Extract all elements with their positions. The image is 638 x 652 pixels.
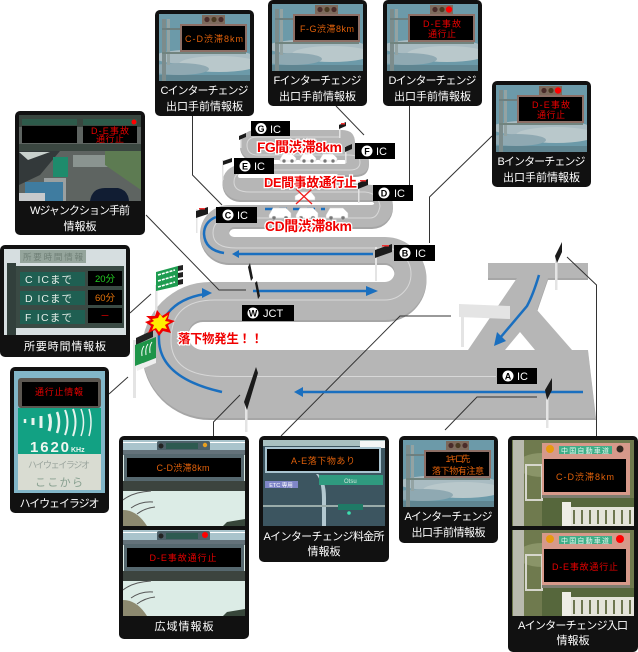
panel: W junction: 通行止	[96, 133, 124, 144]
panel: W junction	[15, 111, 145, 235]
panel: A toll gate board: 情報板	[308, 544, 340, 558]
panel: F interchange	[262, 0, 372, 106]
IC label F	[355, 143, 395, 159]
IC label B: B	[402, 248, 409, 258]
panel: W junction: D-E事故	[91, 125, 129, 136]
panel: F interchange: Fインターチェンジ	[274, 74, 362, 87]
panel: A exit board: Aインターチェンジ	[404, 510, 492, 523]
panel: B interchange: D-E事故	[532, 99, 570, 110]
panel: A toll gate board: Otsu	[344, 479, 357, 485]
panel: D interchange: 出口手前情報板	[394, 89, 471, 103]
panel: D interchange: Dインターチェンジ	[388, 74, 476, 87]
panel: wide area board: D-E事故通行止	[150, 552, 216, 563]
panel: A entrance board: D-E事故通行止	[552, 561, 618, 572]
IC label E: IC	[254, 161, 265, 173]
panel: highway radio: 1620	[30, 439, 69, 456]
JCT label W	[242, 305, 294, 321]
panel: B interchange: 通行止	[537, 109, 565, 120]
IC label B	[394, 245, 435, 261]
panel: travel time board	[0, 245, 130, 357]
IC label G	[251, 121, 290, 136]
IC label B: IC	[415, 248, 426, 260]
panel: A toll gate board: Aインターチェンジ料金所	[264, 529, 384, 543]
sign: green guide board	[156, 265, 183, 291]
roadside signs	[133, 122, 562, 432]
IC label G: IC	[270, 124, 281, 136]
IC label A: IC	[517, 371, 528, 383]
IC label D: D	[381, 188, 388, 198]
panel: A exit board	[393, 436, 503, 543]
IC label A	[497, 368, 537, 384]
panel: D interchange: D-E事故	[423, 18, 461, 29]
panel: A entrance board: 中国自動車道	[561, 536, 609, 545]
panel: A exit board: 1キロ先	[446, 453, 470, 464]
sign: highway radio	[135, 330, 156, 371]
traffic flow arrows	[159, 209, 583, 397]
panel: travel time board: F ICまで	[25, 312, 72, 324]
panel: A entrance board: C-D渋滞8km	[556, 471, 614, 482]
JCT label W: W	[249, 308, 258, 318]
panel: highway radio	[10, 367, 109, 513]
panel: D interchange: 通行止	[428, 28, 456, 39]
panel: F interchange: F-G渋滞8km	[300, 23, 354, 34]
panel: W junction: Wジャンクション手前	[30, 203, 130, 217]
panel: A toll gate board: A-E落下物あり	[291, 455, 355, 466]
panel: highway radio: 通行止情報	[35, 386, 83, 397]
panel: travel time board: 所要時間情報板	[24, 339, 106, 353]
panel: C interchange: Cインターチェンジ	[160, 84, 248, 97]
IC label C: C	[225, 210, 232, 220]
crash mark	[296, 189, 312, 204]
road labels: FG: FG間渋滞8km	[257, 139, 342, 155]
IC label A: A	[505, 372, 512, 382]
panel: B interchange	[486, 81, 596, 187]
panel: travel time board: －	[100, 311, 110, 322]
panel: C interchange	[149, 10, 259, 116]
panel: wide area board: 広域情報板	[154, 619, 214, 633]
cars in congestion	[269, 154, 348, 220]
IC label F: IC	[376, 146, 387, 158]
panel: A entrance board: 中国自動車道	[561, 446, 609, 455]
panel: travel time board: 20分	[95, 274, 116, 285]
panel: highway radio: KHz	[71, 447, 85, 454]
panel: C interchange: C-D渋滞8km	[185, 33, 243, 44]
IC label E: E	[242, 162, 248, 172]
explosion marker	[145, 310, 175, 336]
panel: highway radio: ハイウェイラジオ	[28, 460, 90, 470]
IC label E	[234, 158, 274, 174]
panel: A entrance board	[508, 436, 638, 652]
road labels: CD: CD間渋滞8km	[265, 218, 352, 234]
panel: travel time board: 60分	[95, 293, 116, 304]
panel: W junction: 情報板	[64, 219, 96, 233]
road labels: DE: DE間事故通行止	[264, 175, 357, 190]
road labels: debris: 落下物発生！！	[178, 331, 263, 346]
JCT label W: JCT	[263, 308, 283, 320]
IC label C	[216, 207, 257, 223]
panel: D interchange	[377, 0, 487, 106]
panel: wide area board: C-D渋滞8km	[156, 462, 210, 473]
IC label D	[373, 185, 413, 201]
panel: B interchange: 出口手前情報板	[503, 170, 580, 184]
panel: A toll gate board: ETC 専用	[269, 481, 293, 489]
panel: A exit board: 出口手前情報板	[412, 525, 486, 539]
IC label G: G	[257, 124, 265, 134]
panel: wide area board	[119, 436, 249, 639]
panel: A entrance board: 情報板	[556, 633, 590, 647]
panel: travel time board: C ICまで	[25, 274, 72, 286]
panel: highway radio: ハイウェイラジオ	[20, 497, 100, 510]
panel: highway radio: ここから	[35, 476, 83, 489]
IC label C: IC	[237, 210, 248, 222]
panel: B interchange: Bインターチェンジ	[498, 155, 586, 168]
road network	[142, 130, 596, 420]
panel: A toll gate board	[259, 436, 389, 562]
panel: A exit board: 落下物有注意	[432, 465, 484, 476]
panel: travel time board: 所要時間情報	[23, 252, 83, 262]
panel: F interchange: 出口手前情報板	[279, 89, 356, 103]
leader lines	[109, 106, 596, 436]
IC label D: IC	[394, 188, 405, 200]
panel: travel time board: D ICまで	[25, 293, 72, 305]
panel: A entrance board: Aインターチェンジ入口	[518, 619, 628, 632]
IC label F: F	[364, 146, 370, 156]
panel: C interchange: 出口手前情報板	[166, 99, 243, 113]
